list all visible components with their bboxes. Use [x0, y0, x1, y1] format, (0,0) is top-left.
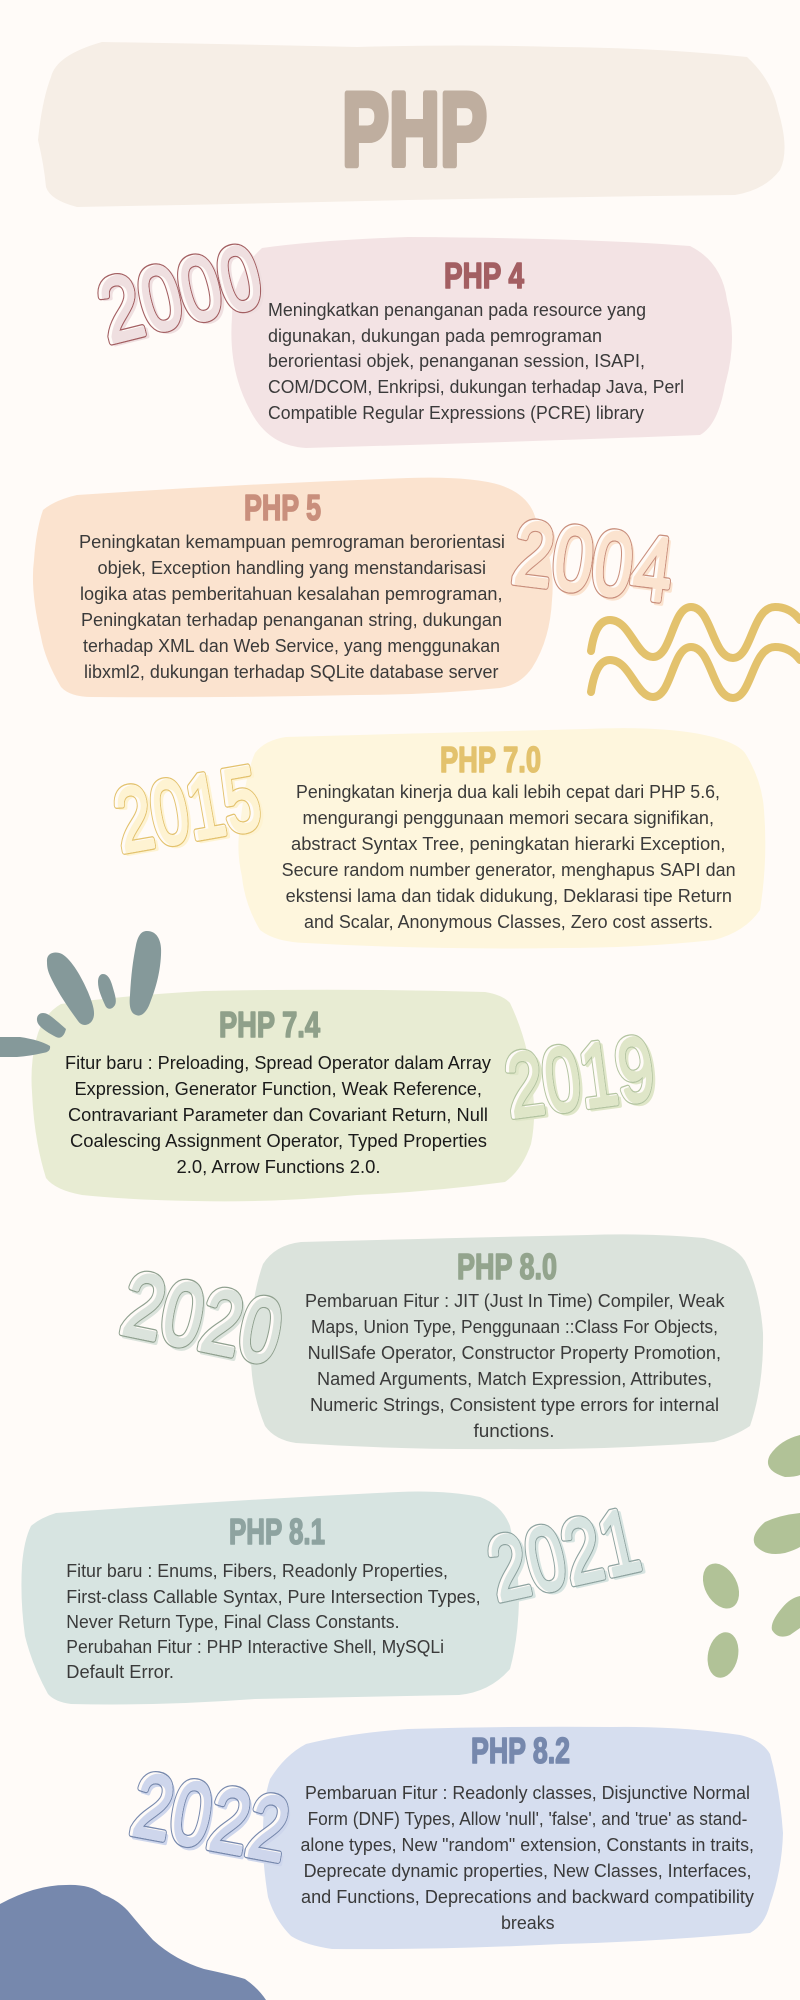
body text: berorientasi objek, penanganan session, ISAPI, — [268, 351, 645, 371]
heading: PHP 7.4: PHP 7.4 — [219, 1004, 320, 1045]
body text: Meningkatkan penanganan pada resource yang — [268, 300, 646, 320]
body text: and Functions, Deprecations and backward compatibility — [301, 1887, 754, 1907]
decoration: teal sprout — [0, 931, 161, 1057]
card background — [21, 1492, 519, 1704]
year: 2020: 2020 — [116, 1257, 292, 1387]
body text: Named Arguments, Match Expression, Attributes, — [317, 1369, 712, 1389]
year: 2004: 2004 — [510, 506, 680, 625]
title blob — [38, 42, 785, 207]
body text: Compatible Regular Expressions (PCRE) library — [268, 403, 644, 423]
body text: Deprecate dynamic properties, New Classes, Interfaces, — [304, 1861, 752, 1881]
year: 2019 — [504, 1034, 656, 1122]
card background — [33, 478, 553, 697]
year: 2021: 2021 — [480, 1490, 648, 1621]
year: 2015: 2015 — [110, 749, 270, 872]
heading: PHP 5: PHP 5 — [244, 487, 321, 528]
year: 2022 — [128, 1771, 289, 1864]
heading: PHP 4: PHP 4 — [444, 255, 524, 296]
body text: Peningkatan terhadap penanganan string, dukungan — [81, 610, 502, 630]
body text: digunakan, dukungan pada pemrograman — [268, 326, 602, 346]
panel: PHP 4 — [89, 225, 732, 448]
body text: logika atas pemberitahuan kesalahan pemrograman, — [80, 584, 503, 604]
body text — [66, 1561, 481, 1682]
card background — [231, 237, 732, 448]
year: 2015: 2015 — [111, 750, 271, 874]
card background — [251, 1234, 763, 1449]
body text: Peningkatan kinerja dua kali lebih cepat dari PHP 5.6, — [296, 782, 720, 802]
year: 2000 — [97, 244, 262, 346]
body text: terhadap XML dan Web Service, yang menggunakan — [83, 636, 500, 656]
year: 2022: 2022 — [127, 1756, 299, 1882]
decoration: green dots — [696, 1435, 800, 1681]
body text: Default Error. — [66, 1662, 174, 1682]
year: 2004: 2004 — [508, 503, 678, 621]
year: 2000: 2000 — [89, 226, 271, 362]
body text: and Scalar, Anonymous Classes, Zero cost asserts. — [304, 912, 713, 932]
year: 2004: 2004 — [508, 503, 678, 621]
body text: breaks — [501, 1913, 555, 1933]
panel: PHP 8.1 — [21, 1490, 651, 1704]
panel: PHP 5 — [33, 478, 681, 697]
heading: PHP 8.0: PHP 8.0 — [457, 1246, 557, 1287]
body text: Form (DNF) Types, Allow 'null', 'false', and 'true' as stand- — [308, 1809, 747, 1829]
body text: Pembaruan Fitur : Readonly classes, Disjunctive Normal — [305, 1783, 750, 1803]
body text: functions. — [474, 1421, 554, 1441]
year: 2022: 2022 — [127, 1758, 298, 1884]
year: 2020: 2020 — [114, 1254, 290, 1384]
panel: title banner — [38, 42, 785, 207]
body text: Pembaruan Fitur : JIT (Just In Time) Compiler, Weak — [305, 1291, 725, 1311]
body text: objek, Exception handling yang menstandarisasi — [98, 558, 486, 578]
body text: Expression, Generator Function, Weak Reference, — [74, 1079, 482, 1099]
year: 2000: 2000 — [92, 226, 274, 363]
year: 2000: 2000 — [92, 228, 275, 365]
heading: PHP 8.1: PHP 8.1 — [229, 1511, 325, 1552]
year: 2020: 2020 — [117, 1255, 293, 1385]
year: 2004 — [510, 518, 673, 606]
body text — [300, 1783, 754, 1933]
panel: PHP 7.4 — [32, 990, 663, 1201]
body text: COM/DCOM, Enkripsi, dukungan terhadap Java, Perl — [268, 377, 684, 397]
body text — [305, 1291, 725, 1441]
body text — [79, 532, 505, 682]
title: PHP: PHP — [342, 72, 487, 188]
body text — [268, 300, 684, 423]
body text: Numeric Strings, Consistent type errors for internal — [310, 1395, 719, 1415]
year: 2021: 2021 — [483, 1492, 651, 1623]
year: 2000: 2000 — [89, 226, 271, 362]
body text: mengurangi penggunaan memori secara signifikan, — [302, 808, 714, 828]
year: 2020 — [118, 1270, 282, 1365]
body text: Contravariant Parameter dan Covariant Return, Null — [68, 1105, 488, 1125]
body text: Peningkatan kemampuan pemrograman berorientasi — [79, 532, 505, 552]
body text: Fitur baru : Preloading, Spread Operator dalam Array — [65, 1053, 491, 1073]
card background — [238, 728, 765, 948]
body text: NullSafe Operator, Constructor Property Promotion, — [308, 1343, 721, 1363]
year: 2022: 2022 — [124, 1754, 296, 1881]
body text: Never Return Type, Final Class Constants. — [66, 1612, 400, 1632]
body text: Maps, Union Type, Penggunaan ::Class For Objects, — [311, 1317, 718, 1337]
year: 2015: 2015 — [107, 748, 267, 872]
year: 2019: 2019 — [500, 1018, 659, 1137]
body text: ekstensi lama dan tidak didukung, Deklarasi tipe Return — [286, 886, 732, 906]
decoration: yellow waves — [591, 607, 800, 698]
body text: libxml2, dukungan terhadap SQLite database server — [84, 662, 498, 682]
body text: Fitur baru : Enums, Fibers, Readonly Properties, — [66, 1561, 448, 1581]
decoration: blue corner blob — [0, 1885, 266, 2000]
panel: PHP 8.2 — [124, 1727, 783, 1949]
heading: PHP 8.2: PHP 8.2 — [471, 1730, 570, 1771]
year: 2019: 2019 — [503, 1021, 663, 1139]
year: 2019: 2019 — [503, 1019, 662, 1137]
year: 2021 — [488, 1508, 646, 1604]
year: 2015 — [114, 763, 263, 856]
body text — [282, 782, 736, 932]
heading: PHP 7.0: PHP 7.0 — [440, 739, 541, 780]
body text — [65, 1053, 491, 1177]
year: 2021: 2021 — [483, 1491, 651, 1621]
body text: abstract Syntax Tree, peningkatan hierarki Exception, — [291, 834, 726, 854]
panel: PHP 8.0 — [113, 1234, 763, 1449]
year: 2020: 2020 — [114, 1254, 290, 1384]
card background — [263, 1727, 783, 1949]
card background — [32, 990, 534, 1201]
body text: 2.0, Arrow Functions 2.0. — [176, 1157, 380, 1177]
body text: Secure random number generator, menghapus SAPI dan — [282, 860, 736, 880]
panel: PHP 7.0 — [107, 728, 765, 948]
body text: Coalescing Assignment Operator, Typed Properties — [70, 1131, 487, 1151]
body text: Perubahan Fitur : PHP Interactive Shell, MySQLi — [66, 1637, 444, 1657]
year: 2021: 2021 — [480, 1490, 648, 1621]
year: 2015: 2015 — [107, 748, 267, 872]
body text: alone types, New "random" extension, Constants in traits, — [300, 1835, 754, 1855]
year: 2004: 2004 — [510, 504, 680, 623]
body text: First-class Callable Syntax, Pure Intersection Types, — [66, 1587, 481, 1607]
year: 2022: 2022 — [124, 1754, 296, 1881]
year: 2019: 2019 — [500, 1018, 659, 1137]
